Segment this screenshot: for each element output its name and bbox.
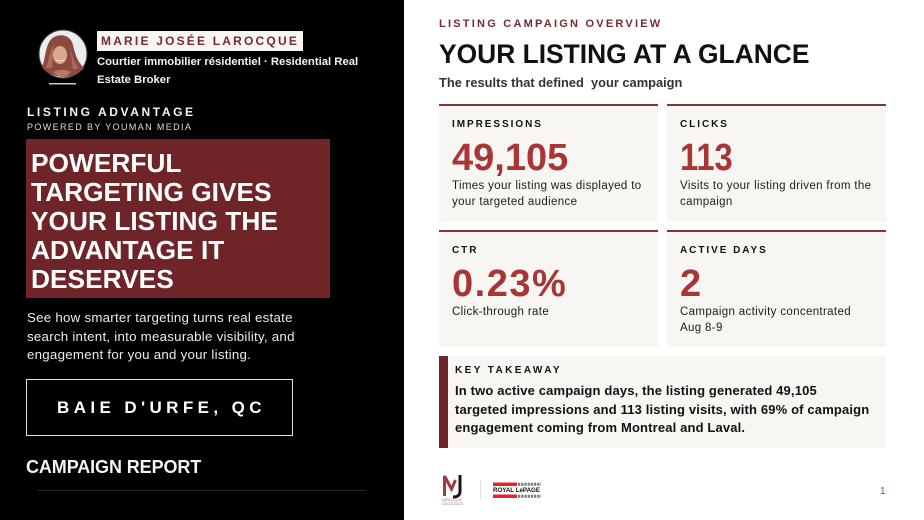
description <box>680 306 851 334</box>
intro text: See how smarter targeting turns real estate <box>27 310 293 325</box>
value: 113 <box>680 137 733 179</box>
label: IMPRESSIONS <box>452 119 543 130</box>
logo: Royal LePage <box>493 482 541 498</box>
description: your targeted audience <box>452 196 577 208</box>
description <box>680 180 871 208</box>
description: Aug 8-9 <box>680 322 723 334</box>
card: active days <box>667 230 886 347</box>
agent role <box>97 56 358 86</box>
location box <box>26 379 293 436</box>
headline block: YOUR LISTING THE <box>31 206 278 236</box>
subtitle: The results that defined your campaign <box>439 75 682 90</box>
card: ctr <box>439 230 658 347</box>
name badge <box>97 31 303 51</box>
label: CLICKS <box>680 119 729 130</box>
callout label: KEY TAKEAWAY <box>455 364 562 376</box>
location box: BAIE D'URFE, QC <box>57 398 266 417</box>
description <box>452 180 642 208</box>
page number: 1 <box>880 486 886 497</box>
agent role: Estate Broker <box>97 74 170 86</box>
headline block: POWERFUL <box>31 148 181 178</box>
name badge: MARIE JOSÉE LAROCQUE <box>101 34 299 48</box>
intro text: search intent, into measurable visibility, and <box>27 328 295 344</box>
campaign report label: CAMPAIGN REPORT <box>26 457 201 477</box>
intro text: engagement for you and your listing. <box>27 347 251 362</box>
headline block: ADVANTAGE IT <box>31 235 224 265</box>
description: Times your listing was displayed to <box>452 180 642 192</box>
card: impressions <box>439 104 658 222</box>
main title: YOUR LISTING AT A GLANCE <box>439 39 809 69</box>
description: campaign <box>680 196 733 208</box>
icon: agent portrait <box>38 30 88 84</box>
panel: left dark panel <box>0 0 404 520</box>
intro text <box>27 310 295 362</box>
section kicker: LISTING CAMPAIGN OVERVIEW <box>439 18 662 30</box>
logo: MJ Larocque: LAROCQUE <box>442 498 463 502</box>
headline block: DESERVES <box>31 264 174 294</box>
headline block: TARGETING GIVES <box>31 177 272 207</box>
callout text: targeted impressions and 113 listing visits, with 69% of campaign <box>455 402 869 417</box>
label: CTR <box>452 245 478 256</box>
powered by line: POWERED BY YOUMAN MEDIA <box>27 122 192 132</box>
description: Click-through rate <box>452 306 549 318</box>
label: ACTIVE DAYS <box>680 245 768 256</box>
agent role: Courtier immobilier résidentiel · Residential Real <box>97 56 358 68</box>
callout: key takeaway <box>439 356 886 448</box>
value: 2 <box>680 263 701 305</box>
callout text: engagement coming from Montreal and Laval. <box>455 420 745 435</box>
description: Campaign activity concentrated <box>680 306 851 318</box>
callout text <box>455 383 869 435</box>
callout text: In two active campaign days, the listing generated 49,105 <box>455 383 817 398</box>
card: clicks <box>667 104 886 222</box>
value: 0.23% <box>452 263 567 305</box>
description: Visits to your listing driven from the <box>680 180 871 192</box>
value: 49,105 <box>452 137 568 179</box>
logo: Royal LePage: ROYAL LePAGE <box>493 487 540 494</box>
logo: MJ Larocque <box>442 475 463 505</box>
program title: LISTING ADVANTAGE <box>27 105 196 119</box>
accent bar <box>439 356 448 448</box>
headline block <box>26 139 330 298</box>
